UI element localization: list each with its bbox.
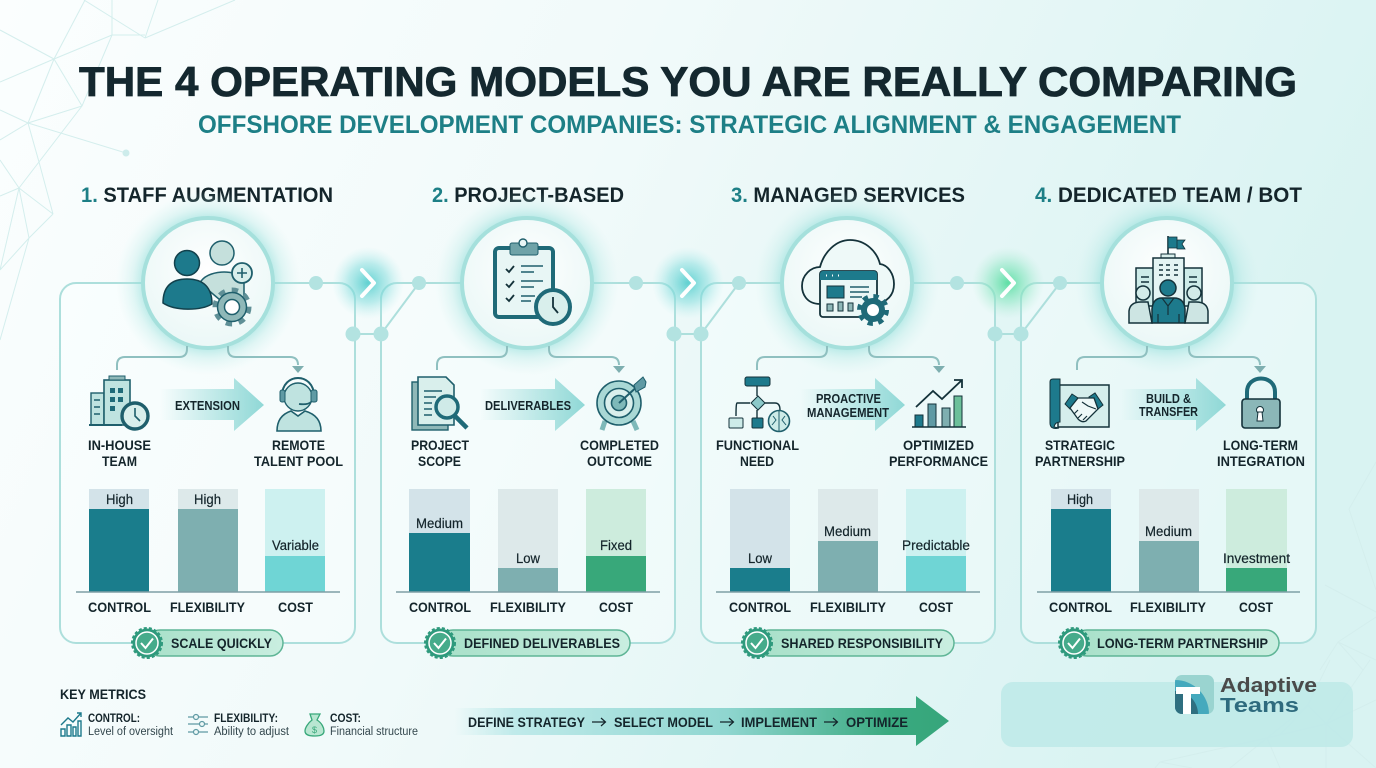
bar chart: COST xyxy=(919,599,953,615)
connector node xyxy=(309,276,323,290)
bar chart: COST xyxy=(278,599,313,615)
bar chart: CONTROL xyxy=(409,599,471,615)
arrow: build and transfer xyxy=(1120,378,1226,431)
icon: target xyxy=(597,377,646,430)
key metrics legend xyxy=(60,686,418,738)
text: cost xyxy=(330,713,418,738)
logo: Adaptive Teams xyxy=(1175,675,1316,714)
panel frame xyxy=(60,283,355,643)
process arrow: DEFINE STRATEGY xyxy=(468,714,586,730)
bar chart xyxy=(716,489,980,615)
captions: INTEGRATION xyxy=(1217,453,1305,469)
badge: scale quickly: SCALE QUICKLY xyxy=(171,635,273,651)
badge: long-term partnership: LONG-TERM PARTNERSHIP xyxy=(1097,635,1268,651)
connector nodes xyxy=(701,276,964,334)
badge: defined deliverables xyxy=(426,628,630,658)
badge: scale quickly xyxy=(132,628,283,658)
arrow: proactive management: MANAGEMENT xyxy=(807,406,889,420)
icon: cost: $ xyxy=(312,725,317,735)
network pattern bottom right xyxy=(1155,462,1376,768)
captions: COMPLETED xyxy=(580,437,659,453)
captions: SCOPE xyxy=(418,453,461,469)
process arrow: IMPLEMENT xyxy=(741,714,817,730)
badge: shared responsibility: SHARED RESPONSIBILITY xyxy=(781,635,944,651)
text: flexibility: Ability to adjust xyxy=(214,726,290,738)
link between panels 1 and 2 xyxy=(332,247,404,342)
logo mark xyxy=(1175,675,1214,714)
bar chart: CONTROL xyxy=(729,599,791,615)
process arrow xyxy=(455,696,949,746)
bar chart: Variable xyxy=(272,538,319,553)
text: flexibility xyxy=(214,713,290,738)
connectors to sub-icons xyxy=(757,346,945,373)
bar chart: Medium xyxy=(416,516,463,531)
bar chart: Predictable xyxy=(902,538,970,553)
panel: staff augmentation xyxy=(60,184,355,658)
captions: LONG-TERM xyxy=(1223,437,1298,453)
bar chart xyxy=(76,489,340,615)
captions xyxy=(716,437,988,469)
icon: control xyxy=(61,713,81,736)
bar chart: Medium xyxy=(1145,524,1192,539)
process arrow: SELECT MODEL xyxy=(614,714,713,730)
bar chart: FLEXIBILITY xyxy=(490,599,567,615)
arrow: proactive management xyxy=(800,378,905,431)
logo: Adaptive Teams: Teams xyxy=(1220,695,1299,717)
icon: people and gear xyxy=(116,191,300,375)
captions xyxy=(88,437,343,469)
captions: REMOTE xyxy=(272,437,325,453)
bar chart: High xyxy=(194,492,221,507)
captions: STRATEGIC xyxy=(1045,437,1115,453)
arrow: extension xyxy=(160,378,264,431)
icon: cloud dashboard xyxy=(755,191,939,375)
arrow: deliverables: DELIVERABLES xyxy=(485,399,571,413)
icon: cost xyxy=(305,714,324,736)
link between panels 2 and 3 xyxy=(652,247,724,342)
bar chart xyxy=(1037,489,1300,615)
text: control: Level of oversight xyxy=(88,726,174,738)
text: control xyxy=(88,713,174,738)
bar chart: Investment xyxy=(1223,551,1290,566)
heading: 2. PROJECT-BASED xyxy=(432,184,624,207)
bar chart: CONTROL xyxy=(1049,599,1112,615)
subtitle: OFFSHORE DEVELOPMENT COMPANIES: STRATEGIC ALIGNMENT & ENGAGEMENT xyxy=(198,111,1181,139)
panel frame xyxy=(701,283,995,643)
bar chart: Fixed xyxy=(600,538,632,553)
captions: OUTCOME xyxy=(587,453,652,469)
network pattern top left xyxy=(0,0,235,340)
process arrow: OPTIMIZE xyxy=(846,714,908,730)
icon: clipboard and clock xyxy=(435,191,619,375)
captions: NEED xyxy=(740,453,774,469)
captions: PROJECT xyxy=(411,437,469,453)
connector nodes xyxy=(381,276,643,334)
bar chart: COST xyxy=(599,599,633,615)
arrow: deliverables xyxy=(480,378,585,431)
icon: flexibility xyxy=(188,714,208,734)
text: cost: COST: xyxy=(330,713,361,725)
icon: in-house team xyxy=(89,376,148,429)
icon: headquarters and team xyxy=(1075,191,1259,375)
icon: remote talent pool xyxy=(277,378,321,431)
arrow: build and transfer: TRANSFER xyxy=(1139,405,1198,419)
captions xyxy=(1035,437,1305,469)
arrow: proactive management: PROACTIVE xyxy=(816,392,881,406)
captions: TEAM xyxy=(102,453,137,469)
connectors to sub-icons xyxy=(437,346,625,373)
text: control: CONTROL: xyxy=(88,713,140,725)
bar chart: Medium xyxy=(824,524,871,539)
captions: TALENT POOL xyxy=(254,453,343,469)
bar chart: COST xyxy=(1239,599,1273,615)
panel: dedicated team / BOT xyxy=(1021,184,1316,658)
text: cost: Financial structure xyxy=(330,726,418,738)
bar chart: FLEXIBILITY xyxy=(1130,599,1207,615)
panel frame xyxy=(381,283,675,643)
icon: lock xyxy=(1242,378,1280,428)
panel frame xyxy=(1021,283,1316,643)
bar chart xyxy=(396,489,660,615)
bar chart: High xyxy=(106,492,133,507)
bar chart: FLEXIBILITY xyxy=(810,599,887,615)
title: THE 4 OPERATING MODELS YOU ARE REALLY COMPARING xyxy=(79,58,1297,105)
bar chart: High xyxy=(1067,492,1093,507)
panel: managed services xyxy=(701,184,995,658)
connectors to sub-icons xyxy=(1077,346,1266,373)
captions: OPTIMIZED xyxy=(903,437,974,453)
captions: IN-HOUSE xyxy=(88,437,151,453)
heading: 4. DEDICATED TEAM / BOT xyxy=(1035,184,1302,207)
icon: strategic partnership xyxy=(1050,379,1109,428)
captions: PARTNERSHIP xyxy=(1035,453,1125,469)
text: flexibility: FLEXIBILITY: xyxy=(214,713,278,725)
logo wordmark: Adaptive xyxy=(1220,675,1317,697)
logo backing panel xyxy=(1001,682,1353,747)
captions: FUNCTIONAL xyxy=(716,437,799,453)
captions xyxy=(411,437,659,469)
icon: project scope xyxy=(412,377,467,430)
legend heading: KEY METRICS xyxy=(60,686,146,702)
link between panels 3 and 4 xyxy=(972,247,1044,342)
heading: 3. MANAGED SERVICES xyxy=(731,184,965,207)
bar chart: Low xyxy=(748,551,772,566)
arrow: build and transfer: BUILD & xyxy=(1146,392,1191,406)
bar chart: Low xyxy=(516,551,540,566)
bar chart: FLEXIBILITY xyxy=(170,599,246,615)
badge: defined deliverables: DEFINED DELIVERABLES xyxy=(464,635,620,651)
bar chart: CONTROL xyxy=(88,599,151,615)
connector nodes xyxy=(1021,276,1067,334)
arrow: extension: EXTENSION xyxy=(175,399,240,413)
icon: flowchart and brain xyxy=(729,377,790,432)
badge: long-term partnership xyxy=(1060,628,1279,658)
heading: 1. STAFF AUGMENTATION xyxy=(81,184,333,207)
captions: PERFORMANCE xyxy=(889,453,988,469)
icon: performance chart xyxy=(912,380,966,427)
badge: shared responsibility xyxy=(742,628,954,658)
connectors to sub-icons xyxy=(117,346,304,373)
panel: project-based xyxy=(381,184,675,658)
